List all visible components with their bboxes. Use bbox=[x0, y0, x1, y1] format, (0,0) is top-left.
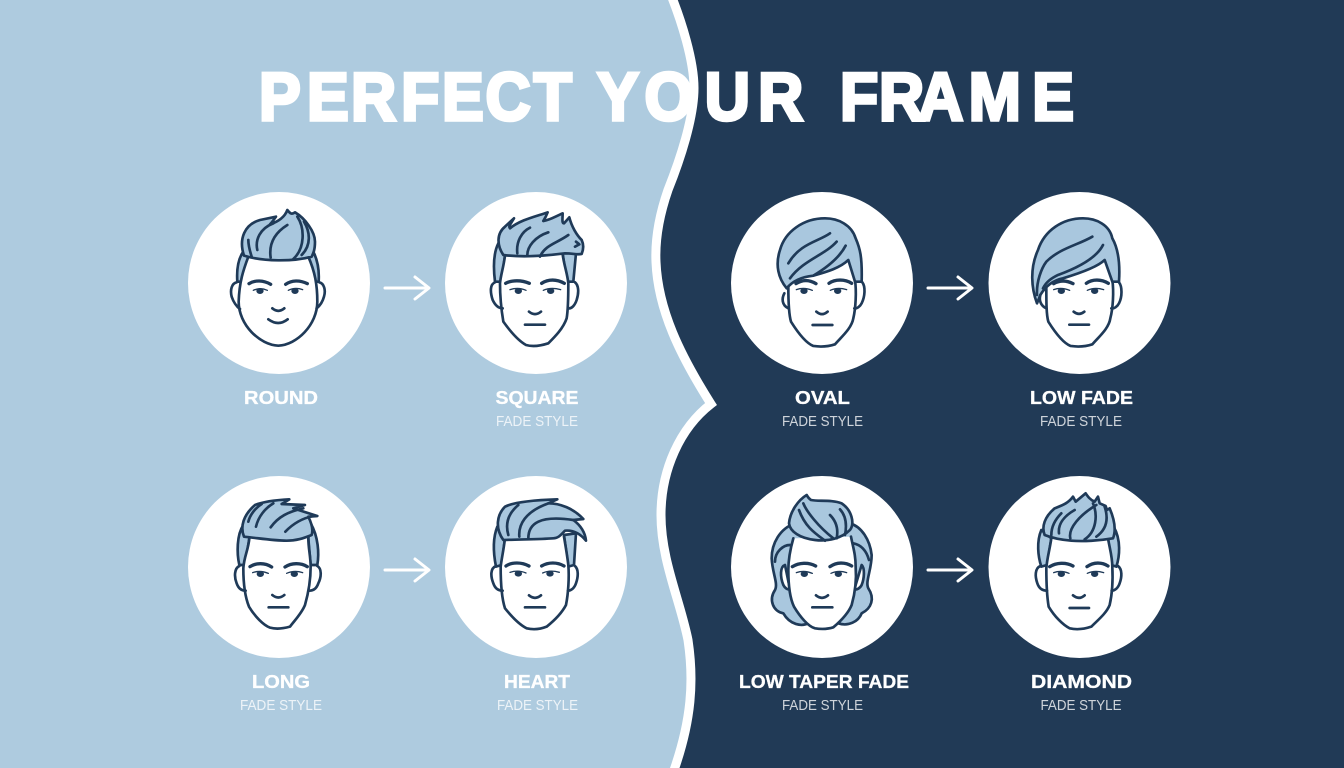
arrow: low taper fade to diamond bbox=[928, 559, 972, 581]
icon: oval face with side-swept fringe bbox=[778, 218, 865, 347]
label: low fade: FADE STYLE bbox=[1040, 414, 1122, 430]
label: diamond: FADE STYLE bbox=[1040, 698, 1122, 714]
panel: dark right background with wavy white divider bbox=[656, 0, 1344, 768]
label: square: SQUARE bbox=[496, 387, 578, 408]
card: low taper fade bbox=[731, 476, 913, 714]
label: low fade bbox=[1030, 387, 1133, 430]
label: long bbox=[240, 671, 322, 714]
icon: low taper fade with long wavy hair bbox=[772, 495, 872, 629]
icon: round face with swept quiff bbox=[231, 210, 325, 346]
title: PERFECT YOUR FRAME bbox=[259, 59, 1074, 135]
arrow: oval to low fade bbox=[928, 277, 972, 299]
card: long bbox=[188, 476, 370, 714]
label: square: FADE STYLE bbox=[496, 414, 578, 430]
icon: low fade with long side sweep bbox=[1032, 218, 1121, 347]
card: round bbox=[188, 192, 370, 408]
label: low taper fade: LOW TAPER FADE bbox=[739, 671, 909, 692]
label: oval: FADE STYLE bbox=[782, 414, 863, 430]
arrow: long to heart bbox=[385, 559, 429, 581]
icon: diamond face with spiked quiff bbox=[1036, 493, 1121, 629]
card: low fade bbox=[988, 192, 1170, 430]
label: low fade: LOW FADE bbox=[1030, 387, 1133, 408]
icon: long face with pushed-back strands bbox=[235, 499, 321, 629]
label: oval bbox=[782, 387, 863, 430]
label: low taper fade: FADE STYLE bbox=[782, 698, 863, 714]
card: oval bbox=[731, 192, 913, 430]
label: heart: FADE STYLE bbox=[497, 698, 578, 714]
arrow: round to square bbox=[385, 277, 429, 299]
label: long: FADE STYLE bbox=[240, 698, 322, 714]
icon: heart face with wave sweep bbox=[491, 499, 586, 629]
label: heart bbox=[497, 671, 578, 714]
label: diamond: DIAMOND bbox=[1031, 671, 1132, 692]
card: square bbox=[445, 192, 627, 430]
card: diamond bbox=[988, 476, 1170, 714]
icon: square face with textured spikes bbox=[491, 212, 583, 346]
label: heart: HEART bbox=[504, 671, 571, 692]
label: round: ROUND bbox=[244, 387, 318, 408]
label: square bbox=[496, 387, 578, 430]
label: oval: OVAL bbox=[795, 387, 850, 408]
card: heart bbox=[445, 476, 627, 714]
label: low taper fade bbox=[739, 671, 909, 714]
label: diamond bbox=[1031, 671, 1132, 714]
label: long: LONG bbox=[252, 671, 310, 692]
